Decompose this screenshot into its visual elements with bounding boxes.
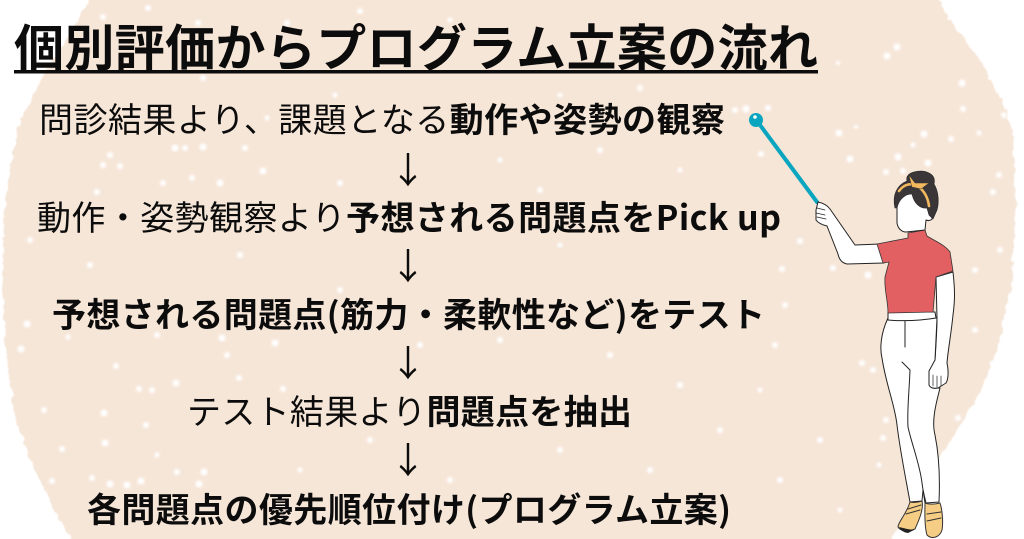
arrow 3: ↓	[390, 335, 426, 387]
title: 個別評価からプログラム立案の流れ	[14, 9, 818, 81]
arrow 1: ↓	[390, 142, 426, 194]
trousers	[881, 318, 940, 503]
pointer stick	[749, 113, 817, 202]
shoes	[898, 501, 943, 537]
waistband	[888, 312, 936, 321]
left arm and hand	[816, 202, 884, 264]
step 1 text: 問診結果より、課題となる動作や姿勢の観察	[39, 93, 725, 142]
arrow 4: ↓	[390, 432, 426, 484]
headband	[899, 184, 929, 206]
arrow 2: ↓	[390, 238, 426, 290]
step 4 text: テスト結果より問題点を抽出	[187, 385, 632, 434]
right arm and hand	[929, 272, 954, 388]
step 5 text: 各問題点の優先順位付け(プログラム立案)	[87, 483, 731, 532]
face	[897, 190, 933, 232]
red top	[877, 230, 953, 313]
hair	[894, 171, 938, 219]
step 2 text: 動作・姿勢観察より予想される問題点をPick up	[37, 191, 781, 240]
step 3 text: 予想される問題点(筋力・柔軟性など)をテスト	[52, 288, 765, 337]
icon: woman with pointer	[749, 113, 954, 537]
